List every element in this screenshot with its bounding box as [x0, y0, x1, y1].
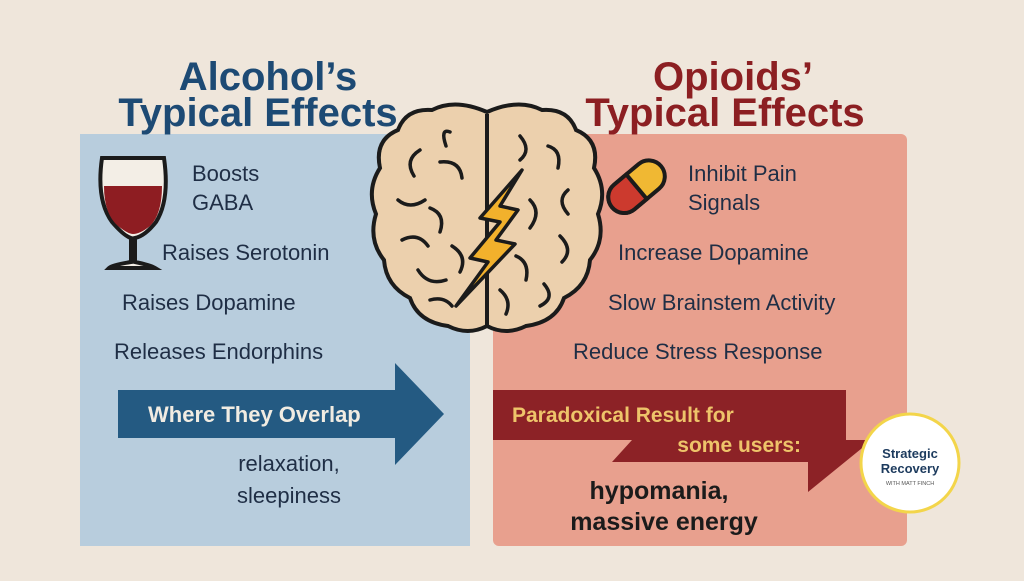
alcohol effects list: GABA [192, 190, 253, 215]
opioid effects list: Slow Brainstem Activity [608, 290, 835, 315]
icon: brain with lightning [372, 104, 602, 331]
opioid effects list: Increase Dopamine [618, 240, 809, 265]
alcohol effects list: Releases Endorphins [114, 339, 323, 364]
logo badge: WITH MATT FINCH [886, 481, 934, 487]
icon: pill [602, 154, 671, 220]
arrow: where they overlap: Where They Overlap [148, 402, 361, 427]
alcohol effects list: Raises Serotonin [162, 240, 330, 265]
title: alcohol: Alcohol’s [179, 55, 357, 99]
arrow: paradoxical result [493, 390, 872, 492]
title: alcohol [118, 55, 398, 135]
overlap text [237, 451, 341, 508]
panel: opioids [493, 134, 907, 546]
opioid effects list: Signals [688, 190, 760, 215]
paradoxical result text [570, 477, 758, 536]
title: opioids: Typical Effects [585, 91, 865, 135]
logo badge: Recovery [881, 461, 940, 476]
opioid effects list: Reduce Stress Response [573, 339, 822, 364]
paradoxical result text: massive energy [570, 508, 758, 536]
alcohol effects list [114, 161, 330, 364]
title: opioids: Opioids’ [653, 55, 813, 99]
opioid effects list: Inhibit Pain [688, 161, 797, 186]
overlap text: sleepiness [237, 483, 341, 508]
alcohol effects list: Raises Dopamine [122, 290, 296, 315]
panel: alcohol [80, 134, 470, 546]
arrow: paradoxical result: some users: [677, 434, 801, 457]
opioid effects list [573, 161, 835, 364]
arrow: paradoxical result: Paradoxical Result for [512, 404, 734, 427]
paradoxical result text: hypomania, [590, 477, 728, 505]
logo badge: Strategic [882, 446, 938, 461]
arrow: where they overlap [118, 363, 444, 465]
title: alcohol: Typical Effects [118, 91, 398, 135]
title: opioids [585, 55, 865, 135]
alcohol effects list: Boosts [192, 161, 259, 186]
overlap text: relaxation, [238, 451, 340, 476]
icon: wine glass [100, 158, 166, 268]
logo badge [861, 414, 959, 512]
